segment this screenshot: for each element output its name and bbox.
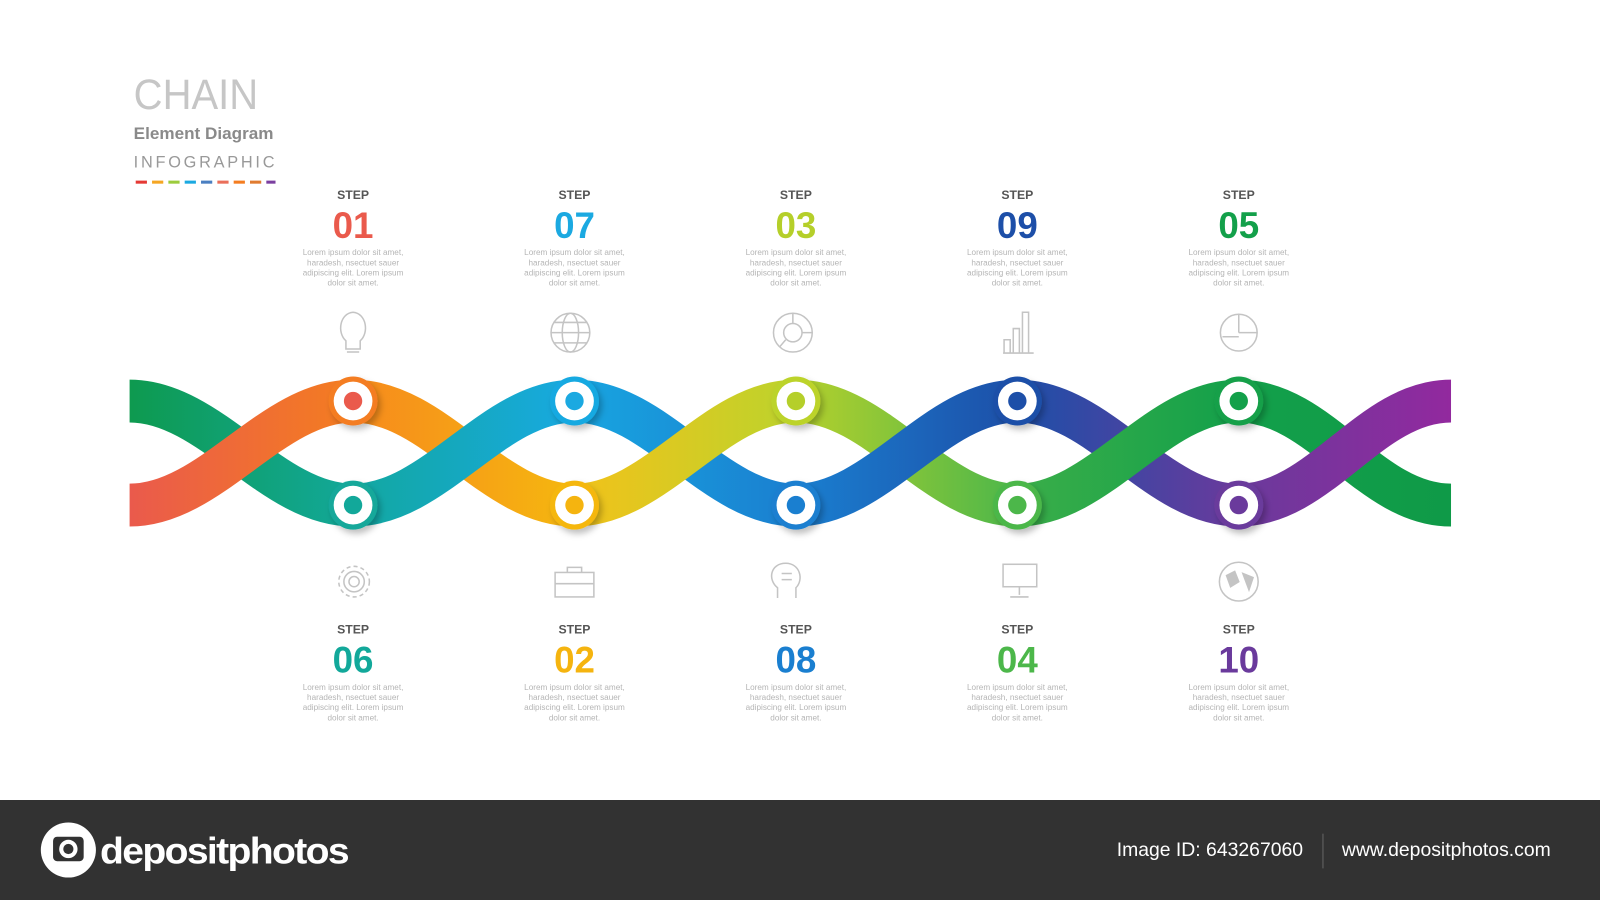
step labels bottom: adipiscing elit. Lorem ipsum	[746, 703, 846, 712]
footer bar: Image ID: 643267060	[1117, 839, 1303, 861]
step labels bottom	[303, 623, 1289, 722]
step labels bottom: STEP	[1001, 623, 1033, 637]
chain diagram	[130, 401, 1451, 505]
step labels top: 03	[775, 205, 816, 246]
step labels top: haradesh, nsectuet sauer	[750, 258, 842, 267]
step labels top: STEP	[780, 188, 812, 202]
step labels top: STEP	[559, 188, 590, 202]
step labels bottom: Lorem ipsum dolor sit amet,	[1188, 683, 1289, 692]
step labels top: 09	[997, 205, 1038, 246]
nodes	[329, 377, 1263, 530]
step labels top: adipiscing elit. Lorem ipsum	[1188, 269, 1289, 278]
step labels top: haradesh, nsectuet sauer	[528, 258, 621, 267]
step labels top: dolor sit amet.	[770, 279, 822, 288]
step labels top: 01	[333, 205, 373, 246]
step labels top: adipiscing elit. Lorem ipsum	[303, 269, 404, 278]
title block: INFOGRAPHIC	[134, 153, 275, 171]
step labels bottom: STEP	[780, 623, 812, 637]
step labels top: 05	[1218, 205, 1259, 246]
step labels top: haradesh, nsectuet sauer	[1193, 258, 1285, 267]
step labels bottom: adipiscing elit. Lorem ipsum	[1188, 703, 1289, 712]
icons	[339, 312, 1258, 601]
step labels bottom: haradesh, nsectuet sauer	[971, 693, 1064, 702]
step labels top: STEP	[337, 188, 369, 202]
step labels top: dolor sit amet.	[992, 279, 1043, 288]
step labels bottom: Lorem ipsum dolor sit amet,	[524, 683, 625, 692]
step labels top: dolor sit amet.	[1213, 279, 1264, 288]
step labels top: Lorem ipsum dolor sit amet,	[967, 248, 1068, 257]
step labels top: adipiscing elit. Lorem ipsum	[524, 269, 625, 278]
step labels top	[303, 188, 1289, 288]
step labels top: STEP	[1223, 188, 1255, 202]
step labels bottom: Lorem ipsum dolor sit amet,	[967, 683, 1068, 692]
footer bar	[0, 800, 1600, 900]
step labels bottom: STEP	[1223, 623, 1255, 637]
step labels bottom: Lorem ipsum dolor sit amet,	[746, 683, 846, 692]
step labels bottom: Lorem ipsum dolor sit amet,	[303, 683, 403, 692]
step labels bottom: haradesh, nsectuet sauer	[528, 693, 621, 702]
footer bar: www.depositphotos.com	[1341, 839, 1551, 861]
title block	[134, 71, 276, 184]
step labels top: haradesh, nsectuet sauer	[971, 258, 1064, 267]
step labels bottom: STEP	[559, 623, 590, 637]
step labels bottom: 08	[775, 639, 816, 680]
title block: CHAIN	[134, 71, 258, 119]
step labels top: Lorem ipsum dolor sit amet,	[303, 248, 403, 257]
footer bar: depositphotos	[100, 830, 348, 871]
step labels top: dolor sit amet.	[327, 279, 379, 288]
step labels top: Lorem ipsum dolor sit amet,	[1188, 248, 1289, 257]
step labels top: STEP	[1001, 188, 1033, 202]
step labels top: Lorem ipsum dolor sit amet,	[746, 248, 846, 257]
step labels bottom: dolor sit amet.	[327, 713, 379, 722]
step labels top: 07	[554, 205, 595, 246]
step labels bottom: adipiscing elit. Lorem ipsum	[967, 703, 1068, 712]
step labels top: adipiscing elit. Lorem ipsum	[746, 269, 846, 278]
step labels bottom: 10	[1218, 639, 1259, 680]
step labels bottom: 04	[997, 639, 1038, 680]
step labels bottom: haradesh, nsectuet sauer	[1193, 693, 1285, 702]
step labels bottom: adipiscing elit. Lorem ipsum	[524, 703, 625, 712]
step labels top: haradesh, nsectuet sauer	[307, 258, 399, 267]
step labels bottom: STEP	[337, 623, 369, 637]
step labels top: adipiscing elit. Lorem ipsum	[967, 269, 1068, 278]
step labels bottom: 02	[554, 639, 595, 680]
step labels bottom: dolor sit amet.	[549, 713, 600, 722]
step labels bottom: 06	[333, 639, 373, 680]
step labels bottom: dolor sit amet.	[770, 713, 822, 722]
step labels bottom: adipiscing elit. Lorem ipsum	[303, 703, 404, 712]
step labels bottom: dolor sit amet.	[992, 713, 1043, 722]
step labels bottom: dolor sit amet.	[1213, 713, 1264, 722]
step labels top: Lorem ipsum dolor sit amet,	[524, 248, 625, 257]
step labels top: dolor sit amet.	[549, 279, 600, 288]
step labels bottom: haradesh, nsectuet sauer	[750, 693, 842, 702]
title block: Element Diagram	[134, 124, 273, 143]
step labels bottom: haradesh, nsectuet sauer	[307, 693, 399, 702]
